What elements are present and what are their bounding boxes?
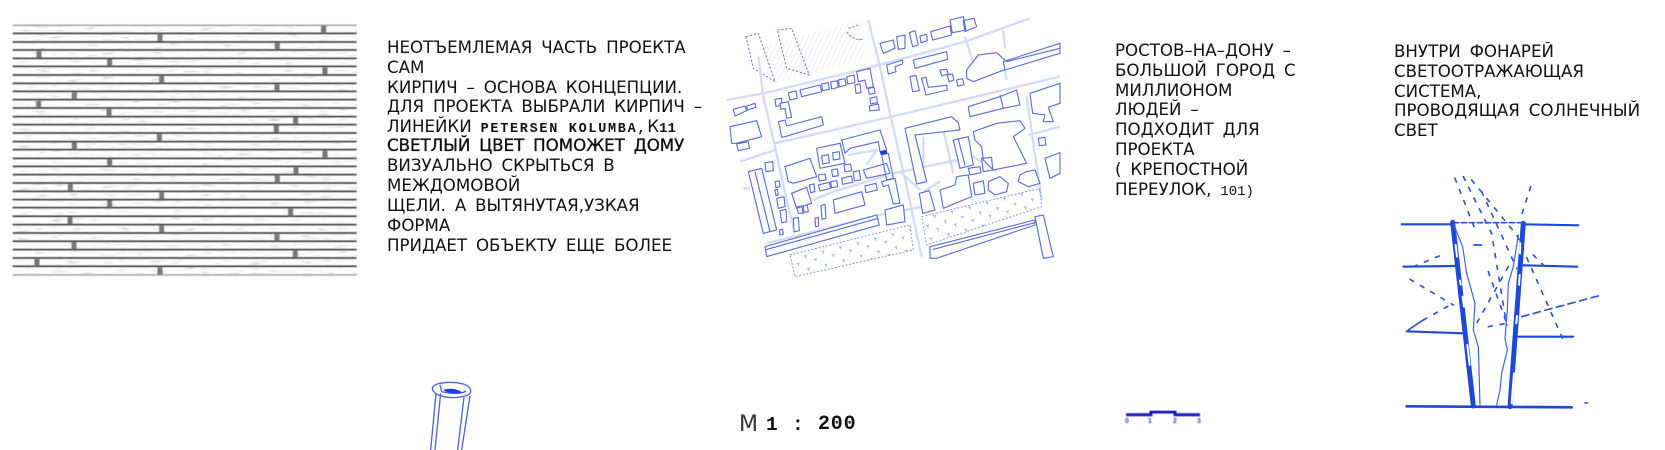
text block: Rostov location: МИЛЛИОНОМ bbox=[1115, 81, 1232, 100]
text block: Rostov location: ПРОЕКТА bbox=[1115, 140, 1195, 159]
floor slabs bbox=[1402, 224, 1578, 407]
scale label bbox=[739, 412, 856, 437]
text block: brick concept: ПРИДАЕТ ОБЪЕКТУ ЕЩЕ БОЛЕЕ bbox=[387, 236, 672, 255]
hatched plot bbox=[746, 20, 867, 83]
scale bar: 1 bbox=[1148, 418, 1152, 425]
scale bar: 3 bbox=[1197, 418, 1201, 425]
text block: Rostov location: ПОДХОДИТ ДЛЯ bbox=[1115, 120, 1260, 139]
scale label: : bbox=[792, 414, 804, 436]
text block: Rostov location: РОСТОВ–НА–ДОНУ – bbox=[1115, 41, 1291, 60]
text block: light system: СВЕТ bbox=[1394, 121, 1438, 140]
scale bar: 2 bbox=[1173, 418, 1177, 425]
text block: light system: СВЕТООТРАЖАЮЩАЯ bbox=[1394, 62, 1584, 81]
buildings bbox=[730, 17, 1060, 258]
text block: brick concept: ЛИНЕЙКИ PETERSEN KOLUMBA,К11 bbox=[387, 117, 676, 137]
scale label: 200 bbox=[818, 413, 856, 436]
scale label: 1 bbox=[766, 414, 778, 436]
text block: brick concept: ДЛЯ ПРОЕКТА ВЫБРАЛИ КИРПИЧ – bbox=[387, 97, 702, 116]
text block: light system: СИСТЕМА, bbox=[1394, 82, 1481, 101]
text block: brick concept: МЕЖДОМОВОЙ bbox=[387, 176, 520, 195]
text block: Rostov location: БОЛЬШОЙ ГОРОД С bbox=[1115, 61, 1296, 80]
scale bar: 0 bbox=[1125, 418, 1129, 425]
text block: Rostov location: ПЕРЕУЛОК, 101) bbox=[1115, 180, 1254, 200]
text block: brick concept: САМ bbox=[387, 58, 424, 77]
roads bbox=[727, 18, 1060, 257]
text block: Rostov location: ЛЮДЕЙ – bbox=[1115, 100, 1199, 119]
light rays bbox=[1408, 177, 1602, 403]
text block: light system: ПРОВОДЯЩАЯ СОЛНЕЧНЫЙ bbox=[1394, 101, 1640, 120]
text block: brick concept: КИРПИЧ – ОСНОВА КОНЦЕПЦИИ. bbox=[387, 78, 682, 97]
text block: brick concept bbox=[387, 38, 702, 255]
text block: brick concept: СВЕТЛЫЙ ЦВЕТ ПОМОЖЕТ ДОМУ bbox=[387, 136, 684, 155]
parks bbox=[790, 188, 1042, 277]
text block: brick concept: НЕОТЪЕМЛЕМАЯ ЧАСТЬ ПРОЕКТА bbox=[387, 38, 686, 57]
text block: brick concept: ВИЗУАЛЬНО СКРЫТЬСЯ В bbox=[387, 156, 615, 175]
text block: light system bbox=[1394, 42, 1640, 140]
text block: Rostov location bbox=[1115, 41, 1296, 200]
scale label: М bbox=[739, 412, 758, 437]
text block: brick concept: ЩЕЛИ. А ВЫТЯНУТАЯ,УЗКАЯ bbox=[387, 196, 640, 215]
text block: light system: ВНУТРИ ФОНАРЕЙ bbox=[1394, 42, 1554, 61]
text block: Rostov location: ( КРЕПОСТНОЙ bbox=[1115, 160, 1248, 179]
text block: brick concept: ФОРМА bbox=[387, 216, 450, 235]
project site highlight bbox=[880, 150, 887, 155]
walls bbox=[1453, 222, 1523, 407]
